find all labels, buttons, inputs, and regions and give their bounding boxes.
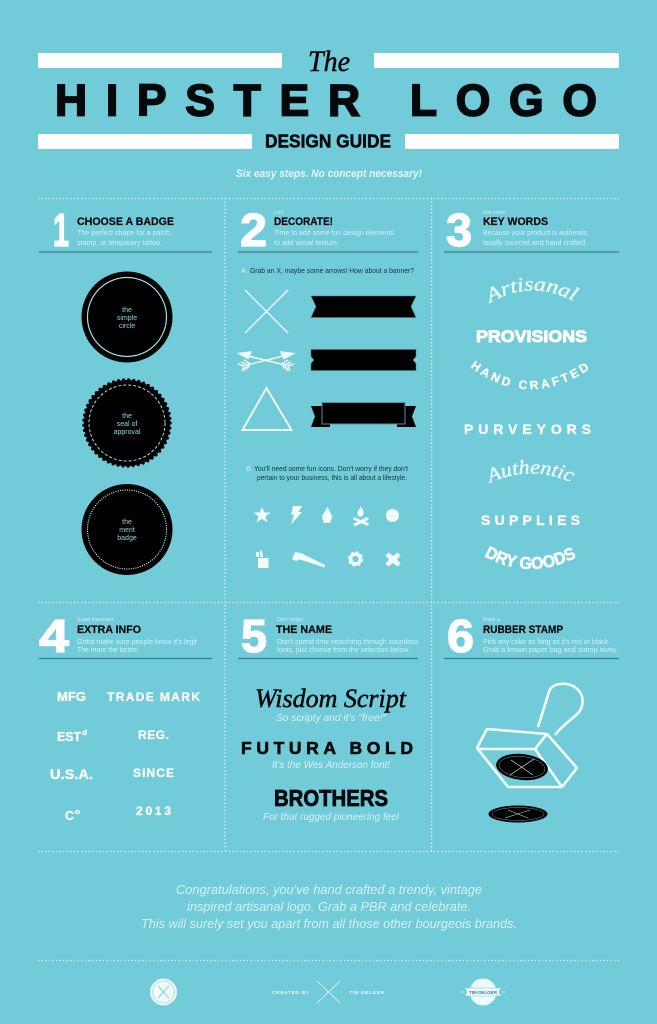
- footer logo right: TIM DELGER: [469, 990, 498, 995]
- font sample: Wisdom Script: Wisdom Script: [255, 684, 407, 713]
- badge: simple circle: the: [122, 307, 132, 314]
- badge: seal of approval: approval: [114, 429, 141, 436]
- step 3 header: [444, 204, 619, 256]
- keyword: Dry Goods: DRY GOODS: [484, 546, 576, 570]
- font sample: Brothers: [263, 785, 400, 823]
- step 6 header: Make a: [483, 617, 500, 623]
- step 4 header: Gotta make sure people know it's legit: [77, 637, 197, 646]
- extra info labels: EST: [57, 729, 81, 744]
- icon: crossed arrows: [238, 352, 294, 371]
- icon: triangle: [242, 388, 292, 430]
- closing message: inspired artisanal logo. Grab a PBR and celebrate.: [187, 899, 471, 914]
- extra info labels: MFG: [57, 689, 86, 704]
- step 4 header: [39, 610, 212, 662]
- extra info labels: [50, 689, 200, 823]
- keyword: Hand Crafted: HAND CRAFTED: [470, 360, 588, 390]
- step 5 header: Don't spend time searching through countless: [277, 637, 418, 646]
- extra info labels: o: [75, 809, 80, 816]
- step 5 header: fonts, just choose from the selection below.: [277, 645, 410, 654]
- step 2 header: [238, 204, 418, 256]
- step 3 header: KEY WORDS: [483, 216, 548, 228]
- step 2 header: to add visual texture.: [274, 238, 339, 247]
- badge: merit badge: the: [122, 519, 132, 526]
- font sample: Brothers: For that rugged pioneering feel: [263, 811, 400, 823]
- step 5 header: THE NAME: [276, 624, 332, 636]
- step 4 header: The more the better.: [77, 645, 139, 654]
- font sample: Brothers: BROTHERS: [274, 785, 388, 811]
- step 6 header: Grab a brown paper bag and stamp away.: [483, 645, 618, 654]
- instruction B: [246, 464, 408, 482]
- footer logo right: [461, 978, 505, 1006]
- badge: simple circle: simple: [117, 315, 137, 322]
- instruction B: B.: [246, 464, 253, 473]
- extra info labels: d: [82, 730, 87, 737]
- icon row: star, bolt, arrowhead, campfire, circle: [254, 506, 399, 526]
- extra info labels: SINCE: [133, 766, 174, 780]
- font sample: Wisdom Script: So scripty and it's "free!": [276, 712, 387, 724]
- keyword: Supplies: SUPPLIES: [481, 512, 580, 528]
- step 3 header: Because your product is authentic,: [483, 228, 589, 237]
- title block: The: [308, 45, 350, 78]
- instruction B: You'll need some fun icons. Don't worry if they don't: [254, 464, 408, 473]
- step 5 header: Don't forget: [277, 617, 304, 623]
- title block: DESIGN GUIDE: [265, 132, 391, 152]
- instruction A: A.: [241, 266, 248, 275]
- step 1 header: CHOOSE A BADGE: [77, 216, 174, 228]
- footer credit: CREATED BY: [272, 990, 310, 996]
- badge: seal of approval: seal of: [117, 421, 137, 428]
- step 6 header: Pick any color as long as it's red or black.: [483, 637, 610, 646]
- stamp impression: [488, 806, 548, 822]
- closing message: [141, 882, 517, 931]
- step 4 header: 4: [39, 610, 69, 662]
- tagline: Six easy steps. No concept necessary!: [236, 168, 422, 180]
- font sample: Futura Bold: It's the Wes Anderson font!: [272, 759, 390, 771]
- step 2 header: 2: [240, 204, 267, 256]
- step 3 header: locally sourced and hand crafted.: [483, 238, 587, 247]
- step 5 header: 5: [241, 610, 267, 662]
- step 5 header: [238, 610, 418, 662]
- font sample: Futura Bold: FUTURA BOLD: [241, 738, 413, 758]
- footer credit: TIM DELGER: [349, 990, 385, 996]
- instruction B: pertain to your business, this is all about a lifestyle.: [257, 473, 407, 482]
- illustration: rubber stamp: [477, 684, 583, 787]
- step 2 header: DECORATE!: [274, 216, 333, 228]
- closing message: Congratulations, you've hand crafted a trendy, vintage: [176, 882, 482, 897]
- step 1 header: 1: [53, 204, 69, 256]
- font sample: Futura Bold: [241, 738, 413, 771]
- extra info labels: C: [65, 808, 75, 823]
- step 3 header: 3: [446, 204, 472, 256]
- footer credit: [272, 981, 385, 1003]
- closing message: This will surely set you apart from all those other bourgeois brands.: [141, 916, 517, 931]
- step 6 header: [444, 610, 619, 662]
- badge: merit badge: merit: [119, 527, 135, 534]
- extra info labels: REG.: [138, 728, 169, 742]
- keyword: Purveyors: PURVEYORS: [464, 421, 591, 437]
- step 6 header: 6: [447, 610, 474, 662]
- badge: simple circle: circle: [119, 323, 135, 330]
- step 1 header: stamp, or temporary tattoo.: [77, 238, 162, 247]
- title block: [38, 45, 619, 152]
- extra info labels: 2013: [136, 804, 171, 818]
- step 6 header: RUBBER STAMP: [483, 624, 563, 636]
- keyword: Provisions: PROVISIONS: [476, 327, 587, 346]
- badge: merit badge: badge: [117, 535, 137, 542]
- step 4 header: EXTRA INFO: [77, 624, 141, 636]
- icon: X: [245, 290, 288, 333]
- keyword: Authentic: Authentic: [488, 460, 574, 484]
- badge: simple circle: [82, 272, 172, 362]
- step 3 header: Use some: [483, 210, 505, 216]
- badge: seal of approval: the: [122, 413, 132, 420]
- badge: merit badge: [82, 484, 172, 575]
- icon row: lighter, axe, gear, cross: [256, 550, 400, 568]
- extra info labels: U.S.A.: [50, 766, 93, 782]
- badge: seal of approval: [84, 380, 170, 466]
- extra info labels: TRADE MARK: [107, 690, 200, 704]
- banner 3: [311, 402, 416, 427]
- instruction A: Grab an X, maybe some arrows! How about a banner?: [250, 266, 414, 275]
- step 1 header: [39, 204, 212, 256]
- title block: HIPSTER LOGO: [55, 76, 597, 126]
- step 2 header: Let's: [274, 210, 283, 216]
- banner 2: [311, 350, 416, 370]
- footer logo left: [150, 978, 177, 1006]
- step 4 header: Super important: [77, 617, 114, 623]
- step 1 header: The perfect shape for a patch,: [77, 228, 172, 237]
- banner 1: [311, 296, 416, 318]
- keyword: Artisanal: Artisanal: [488, 278, 580, 304]
- step 2 header: Time to add some fun design elements: [274, 228, 394, 237]
